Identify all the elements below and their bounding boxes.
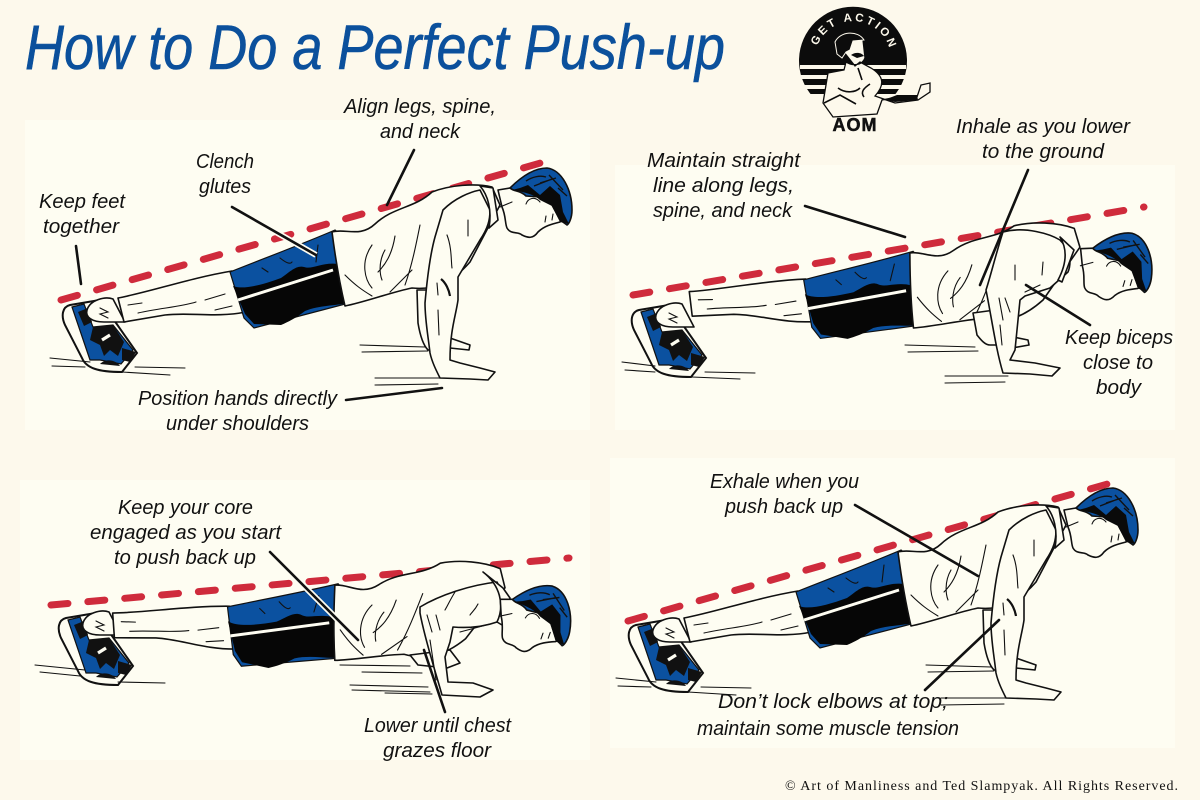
- label: Keep biceps: body: [1096, 377, 1142, 399]
- panel 4: pushing back up: [616, 471, 1138, 740]
- label: Maintain straight line: Maintain straight: [647, 150, 801, 172]
- alignment dashed line: [61, 160, 551, 300]
- logo: Get Action AOM badge: GET ACTION: [811, 14, 896, 47]
- leader lines: [270, 552, 445, 712]
- label: Align legs: [343, 96, 496, 143]
- logo figure: [823, 33, 930, 117]
- label: Keep feet together: Keep feet: [39, 191, 126, 213]
- label: Keep biceps: Keep biceps: [1065, 327, 1173, 349]
- label: Position hands: Position hands directly: [138, 388, 338, 410]
- alignment dashed line: [628, 481, 1118, 621]
- label: Align legs: and neck: [380, 121, 461, 143]
- figure 1: [50, 168, 572, 385]
- label: Exhale: Exhale when you: [710, 471, 859, 493]
- label: Keep feet together: together: [43, 216, 120, 238]
- alignment dashed line: [51, 558, 569, 605]
- panel backgrounds: [20, 120, 1175, 760]
- leader lines: [805, 170, 1090, 325]
- leader lines: [855, 505, 999, 690]
- label: Keep your core: [90, 497, 282, 569]
- label: Keep biceps: close to: [1083, 352, 1153, 374]
- logo: Get Action AOM badge: AOM: [832, 115, 878, 135]
- panel 2: lowering: [622, 116, 1173, 399]
- label: Maintain straight line: line along legs,: [653, 175, 794, 197]
- copyright: © Art of Manliness and Ted Slampyak. All Rights Reserved.: [785, 779, 1178, 794]
- label: Inhale: to the ground: [982, 141, 1105, 163]
- label: Clench glutes: [196, 151, 254, 198]
- label: Clench glutes: glutes: [199, 176, 251, 198]
- logo: Get Action AOM badge: [799, 6, 931, 135]
- alignment dashed line: [633, 207, 1144, 295]
- label: Keep biceps: [1065, 327, 1173, 399]
- panel 1: starting position: [39, 96, 572, 435]
- label: Lower until chest: [364, 715, 512, 762]
- title: How to Do a Perfect Push-up: [25, 13, 725, 83]
- label: Position hands: [138, 388, 338, 435]
- label: Clench glutes: Clench: [196, 151, 254, 173]
- label: Lower until chest: Lower until chest: [364, 715, 512, 737]
- label: Don't lock elbows: Don’t lock elbows at top;: [718, 691, 948, 713]
- label: Inhale: [956, 116, 1131, 163]
- label: Don't lock elbows: maintain some muscle tension: [697, 718, 959, 740]
- label: Align legs: Align legs, spine,: [343, 96, 496, 118]
- label: Exhale: [710, 471, 859, 518]
- label: Maintain straight line: spine, and neck: [653, 200, 793, 222]
- label: Exhale: push back up: [724, 496, 843, 518]
- label: Keep feet together: [39, 191, 126, 238]
- panel 3: bottom position: [35, 497, 577, 762]
- label: Don't lock elbows: [697, 691, 959, 740]
- leader lines: [76, 150, 442, 400]
- figure 2: [622, 179, 1157, 383]
- label: Maintain straight line: [647, 150, 801, 222]
- figure 4: [616, 488, 1138, 705]
- label: Inhale: Inhale as you lower: [956, 116, 1131, 138]
- label: Keep your core: Keep your core: [118, 497, 253, 519]
- figure 3: [35, 502, 577, 709]
- label: Keep your core: to push back up: [114, 547, 256, 569]
- label: Position hands: under shoulders: [166, 413, 309, 435]
- label: Keep your core: engaged as you start: [90, 522, 282, 544]
- label: Lower until chest: grazes floor: [383, 740, 492, 762]
